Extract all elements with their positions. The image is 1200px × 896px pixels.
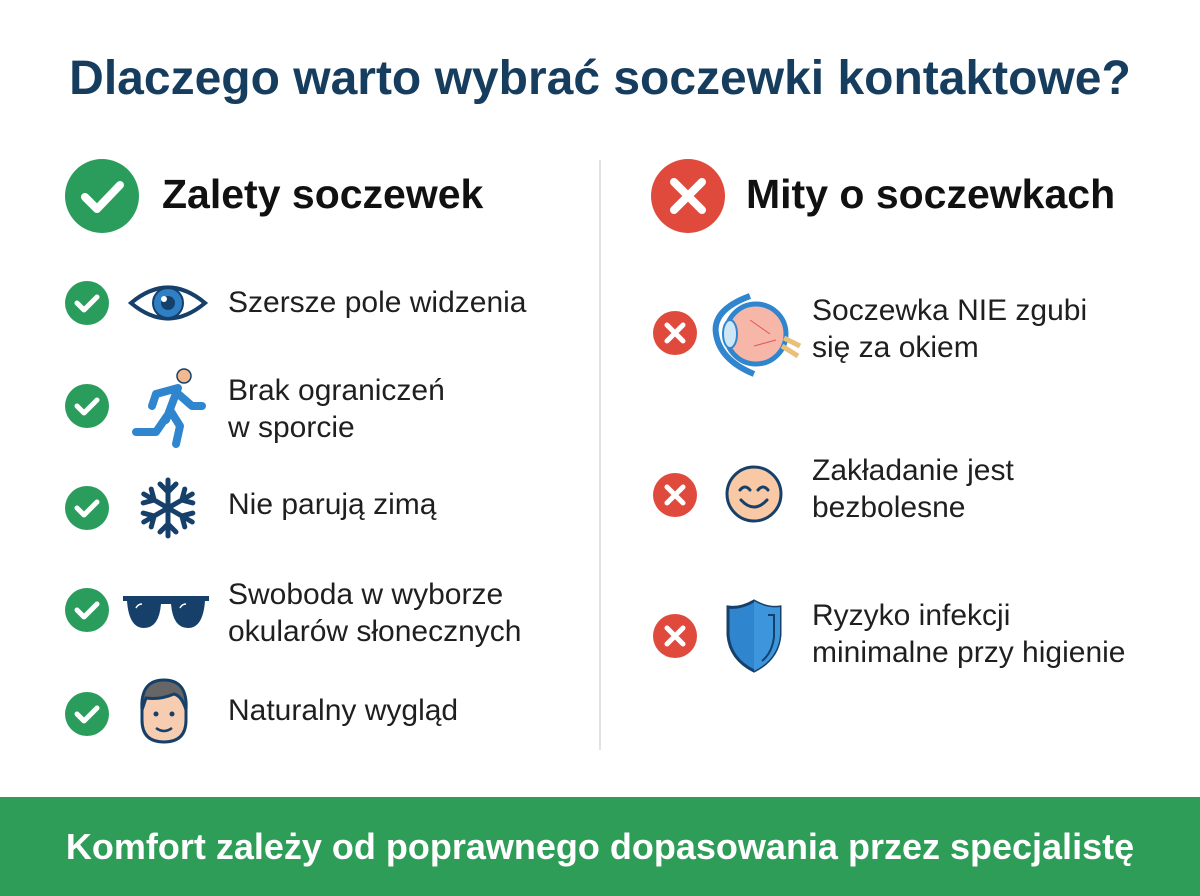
footer banner <box>0 797 1200 896</box>
item: lens behind eye: Soczewka NIE zgubi <box>812 294 1087 327</box>
item: painless: bezbolesne <box>812 491 965 524</box>
icon: big x <box>651 159 725 233</box>
icon: smiley <box>726 466 782 522</box>
icon: eye anatomy <box>712 293 801 377</box>
heading: advantages: Zalety soczewek <box>162 171 483 217</box>
icon: face <box>140 678 188 744</box>
title: Dlaczego warto wybrać soczewki kontaktowe? <box>69 52 1131 105</box>
item: natural look <box>65 678 458 744</box>
panel: advantages <box>65 159 526 744</box>
icon: sunglasses <box>123 596 209 628</box>
item: infection <box>653 599 1125 673</box>
icon: big check <box>65 159 139 233</box>
item: sunglasses: Swoboda w wyborze <box>228 578 503 611</box>
item: infection: minimalne przy higienie <box>812 636 1125 669</box>
item: natural look: Naturalny wygląd <box>228 694 458 727</box>
icon: shield <box>726 599 782 673</box>
item: lens behind eye: się za okiem <box>812 331 979 364</box>
item: painless: Zakładanie jest <box>812 454 1014 487</box>
item: infection: Ryzyko infekcji <box>812 599 1010 632</box>
panel: myths <box>651 159 1125 673</box>
item: field of view: Szersze pole widzenia <box>228 286 526 319</box>
item: winter <box>65 478 436 538</box>
heading: myths: Mity o soczewkach <box>746 171 1115 217</box>
icon: eye <box>128 285 208 321</box>
item: painless <box>653 454 1014 524</box>
heading: advantages <box>65 159 484 233</box>
footer banner: Komfort zależy od poprawnego dopasowania przez specjalistę <box>66 826 1134 867</box>
item: lens behind eye <box>653 293 1087 377</box>
item: sport: w sporcie <box>228 411 355 444</box>
item: sunglasses <box>65 578 521 648</box>
heading: myths <box>651 159 1115 233</box>
divider <box>599 160 601 750</box>
item: sport: Brak ograniczeń <box>228 374 445 407</box>
item: sport <box>65 368 445 448</box>
icon: snowflake <box>140 478 196 538</box>
item: winter: Nie parują zimą <box>228 488 436 521</box>
item: sunglasses: okularów słonecznych <box>228 615 521 648</box>
item: field of view <box>65 281 526 325</box>
icon: runner <box>132 368 206 448</box>
